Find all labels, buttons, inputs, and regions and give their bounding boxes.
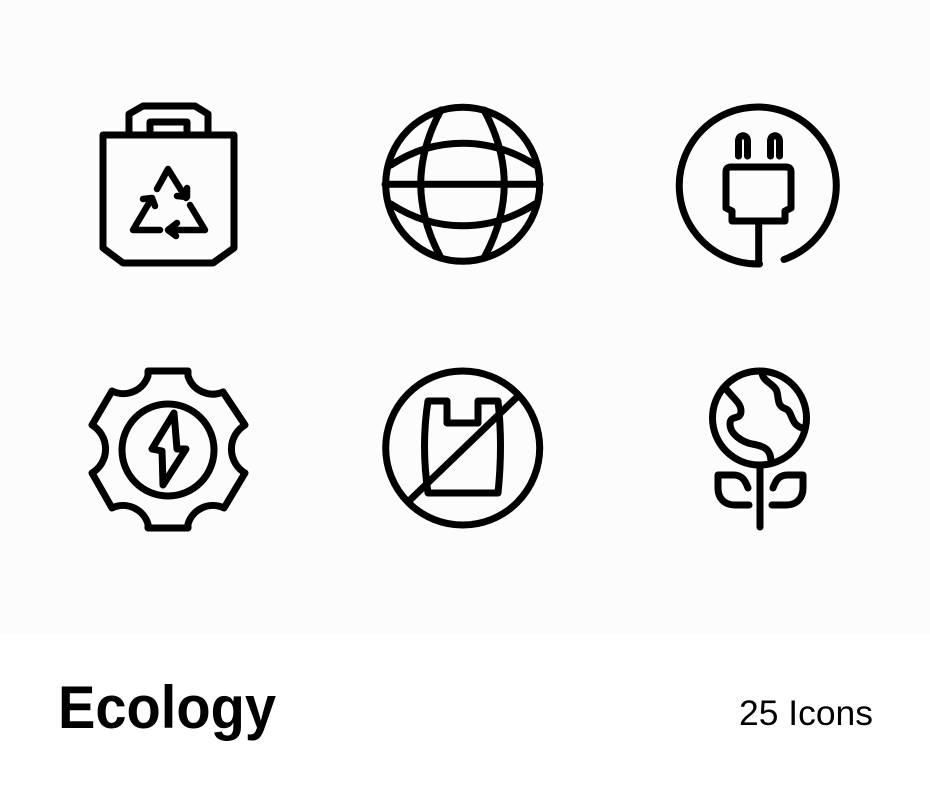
icon: plug in circle <box>679 107 836 264</box>
title: Ecology <box>58 674 277 741</box>
icon: no plastic bag <box>386 371 540 525</box>
icon: recycling bag <box>103 106 234 263</box>
icon: earth flower <box>712 371 806 527</box>
icons grid <box>92 106 836 528</box>
icon: gear with lightning bolt <box>92 371 245 528</box>
icon count label: 25 Icons <box>739 694 873 733</box>
icon: globe <box>385 107 540 261</box>
